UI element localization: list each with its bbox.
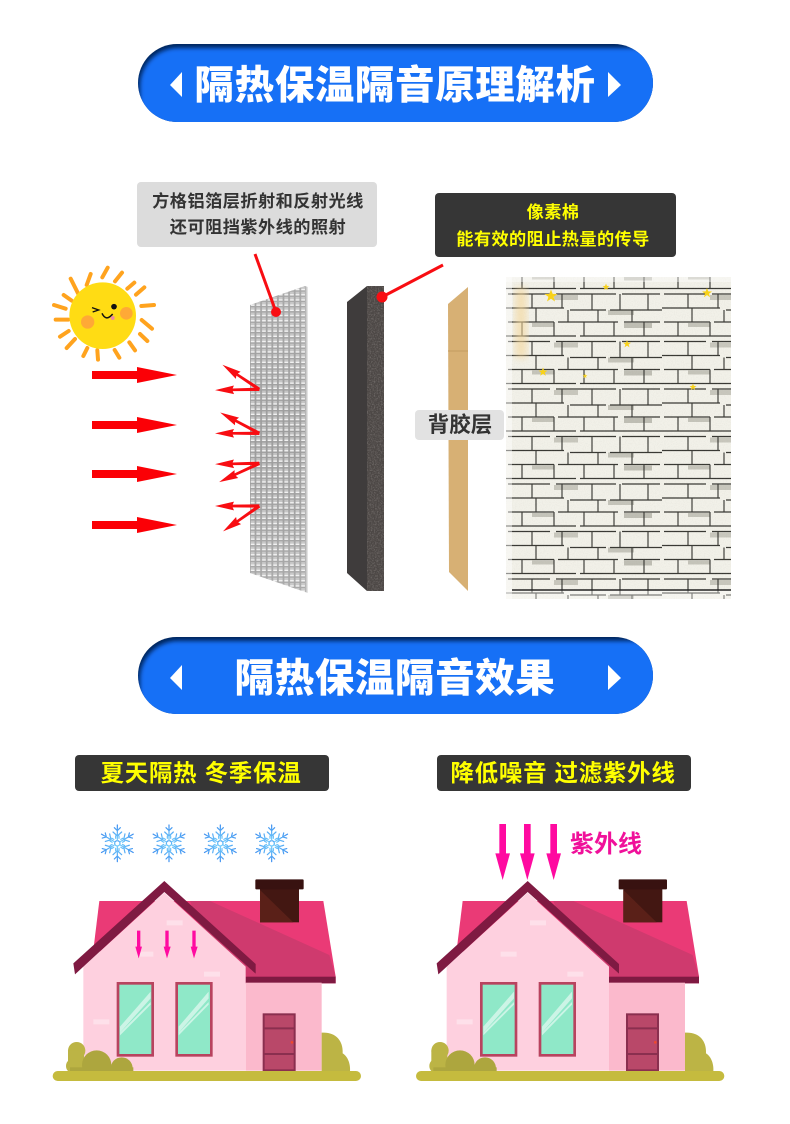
callout: foam layer: 像素棉 xyxy=(527,202,579,222)
panel: foil layer xyxy=(250,286,308,593)
label: adhesive layer xyxy=(415,410,504,440)
callout: foil layer xyxy=(137,182,377,247)
text: ultraviolet label: 紫外线 xyxy=(570,831,642,858)
heading: effect xyxy=(138,637,653,714)
panel: foam layer xyxy=(347,286,384,591)
heading: principle xyxy=(138,44,653,122)
panel: adhesive layer xyxy=(448,287,468,591)
callout: foam layer: 能有效的阻止热量的传导 xyxy=(456,229,650,249)
arrows: reflected rays xyxy=(215,361,262,535)
line: foil pointer xyxy=(255,254,281,317)
label: adhesive layer: 背胶层 xyxy=(428,413,492,437)
arrows: incoming heat xyxy=(92,367,177,533)
arrows: indoor heat xyxy=(135,931,198,958)
illustration: left house xyxy=(53,879,361,1081)
callout: foil layer: 还可阻挡紫外线的照射 xyxy=(170,217,346,237)
label: summer and winter: 夏天隔热 冬季保温 xyxy=(101,760,301,786)
arrows: ultraviolet xyxy=(495,824,561,880)
icon: smiling sun xyxy=(54,268,154,360)
heading: effect: 隔热保温隔音效果 xyxy=(235,657,555,701)
icon: snowflakes xyxy=(99,825,290,862)
callout: foam layer xyxy=(435,193,676,257)
line: foam pointer xyxy=(376,265,443,302)
panel: brick wall xyxy=(506,277,731,599)
callout: foil layer: 方格铝箔层折射和反射光线 xyxy=(152,191,364,211)
label: noise and uv xyxy=(437,755,691,791)
heading: principle: 隔热保温隔音原理解析 xyxy=(194,64,596,108)
label: summer and winter xyxy=(75,755,329,791)
label: noise and uv: 降低噪音 过滤紫外线 xyxy=(450,760,676,786)
illustration: right house xyxy=(416,879,724,1081)
